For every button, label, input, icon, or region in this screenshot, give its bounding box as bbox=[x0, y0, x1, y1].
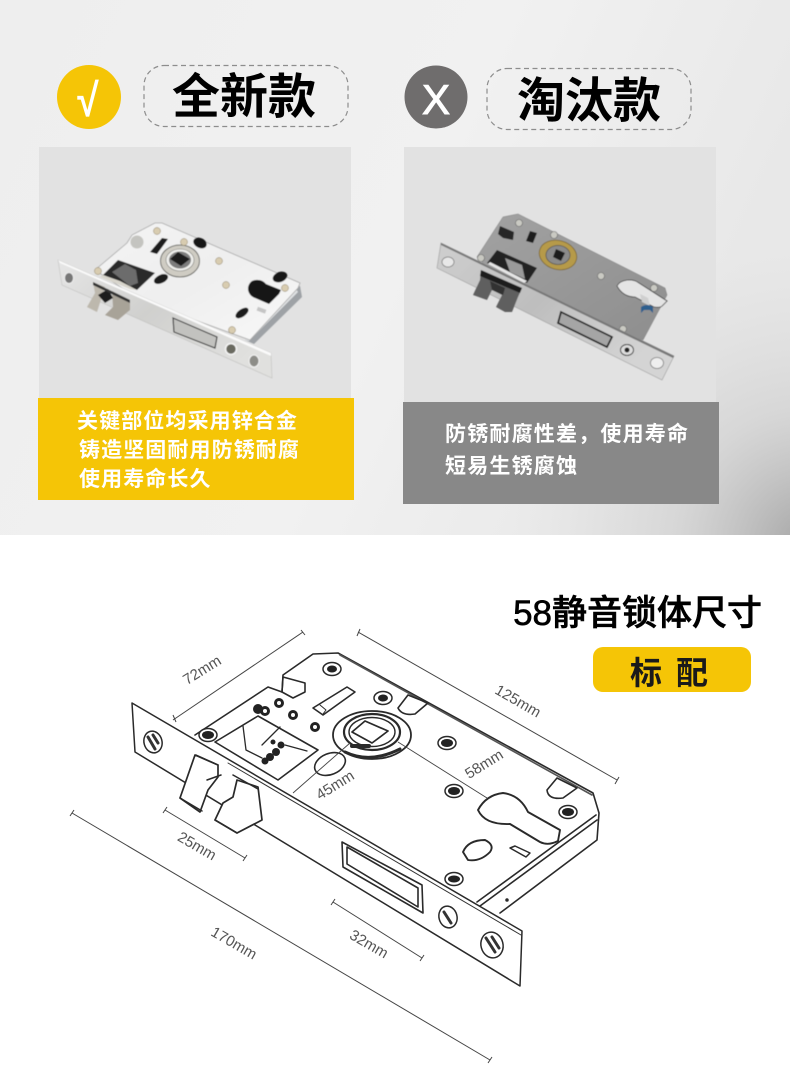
faceplate bbox=[132, 703, 522, 986]
icon: grey cross badge: X bbox=[422, 76, 450, 123]
badge: standard bbox=[593, 647, 751, 692]
dimension: 170mm: 170mm bbox=[208, 924, 260, 963]
faceplate hatching on holes bbox=[148, 735, 499, 952]
new model header bbox=[57, 65, 348, 129]
old model header bbox=[404, 66, 691, 130]
heading: old model: 淘汰款 bbox=[517, 75, 661, 128]
icon: grey cross badge bbox=[404, 66, 468, 128]
dimension: 170mm bbox=[70, 810, 492, 1063]
heading: lock body dimensions: 58静音锁体尺寸 bbox=[513, 594, 762, 633]
callout: new model benefits: 铸造坚固耐用防锈耐腐 bbox=[79, 439, 300, 462]
heading: new model bbox=[144, 66, 348, 126]
notches and slots bbox=[282, 677, 577, 798]
illustration: new zinc-alloy lock bbox=[58, 223, 302, 378]
illustration: old lock bbox=[437, 214, 674, 380]
dimension: 45mm: 45mm bbox=[313, 767, 357, 804]
latch window mechanism bbox=[215, 698, 320, 780]
dimension: 45mm bbox=[293, 743, 357, 804]
callout: old model drawbacks bbox=[403, 402, 719, 504]
icon: yellow check badge: √ bbox=[77, 75, 99, 127]
callout: old model drawbacks: 短易生锈腐蚀 bbox=[445, 455, 578, 478]
panel: new model photo bbox=[39, 147, 351, 400]
spindle hub bbox=[333, 711, 411, 759]
badge: standard: 配 bbox=[676, 655, 708, 691]
dimension: 72mm bbox=[173, 630, 305, 722]
technical drawing: lock body bbox=[132, 653, 599, 986]
faceplate rectangular opening bbox=[342, 842, 423, 913]
panel: old model photo bbox=[404, 147, 716, 403]
callout: new model benefits: 关键部位均采用锌合金 bbox=[77, 409, 298, 433]
callout: old model drawbacks: 防锈耐腐性差，使用寿命 bbox=[445, 422, 689, 446]
callout: new model benefits: 使用寿命长久 bbox=[79, 467, 212, 491]
cylinder keyhole bbox=[463, 793, 560, 901]
dimension: 125mm bbox=[357, 629, 619, 784]
latch bolts bbox=[180, 755, 262, 833]
dimension: 25mm bbox=[163, 807, 247, 864]
dimension: 25mm: 25mm bbox=[174, 829, 219, 864]
dimension: 72mm: 72mm bbox=[180, 652, 224, 689]
dimension: 58mm bbox=[398, 742, 506, 798]
dimension: 32mm bbox=[331, 899, 424, 962]
top comparison background bbox=[0, 0, 790, 535]
icon: yellow check badge bbox=[57, 65, 121, 129]
dimension: 125mm: 125mm bbox=[492, 682, 544, 721]
dimension: 32mm: 32mm bbox=[346, 927, 391, 962]
heading: old model bbox=[487, 68, 691, 130]
callout: new model benefits bbox=[38, 398, 354, 500]
dimension: 58mm: 58mm bbox=[462, 746, 506, 783]
body outline bbox=[195, 653, 599, 913]
heading: new model: 全新款 bbox=[172, 71, 316, 124]
screws bbox=[199, 662, 577, 886]
badge: standard: 标 bbox=[630, 655, 662, 691]
